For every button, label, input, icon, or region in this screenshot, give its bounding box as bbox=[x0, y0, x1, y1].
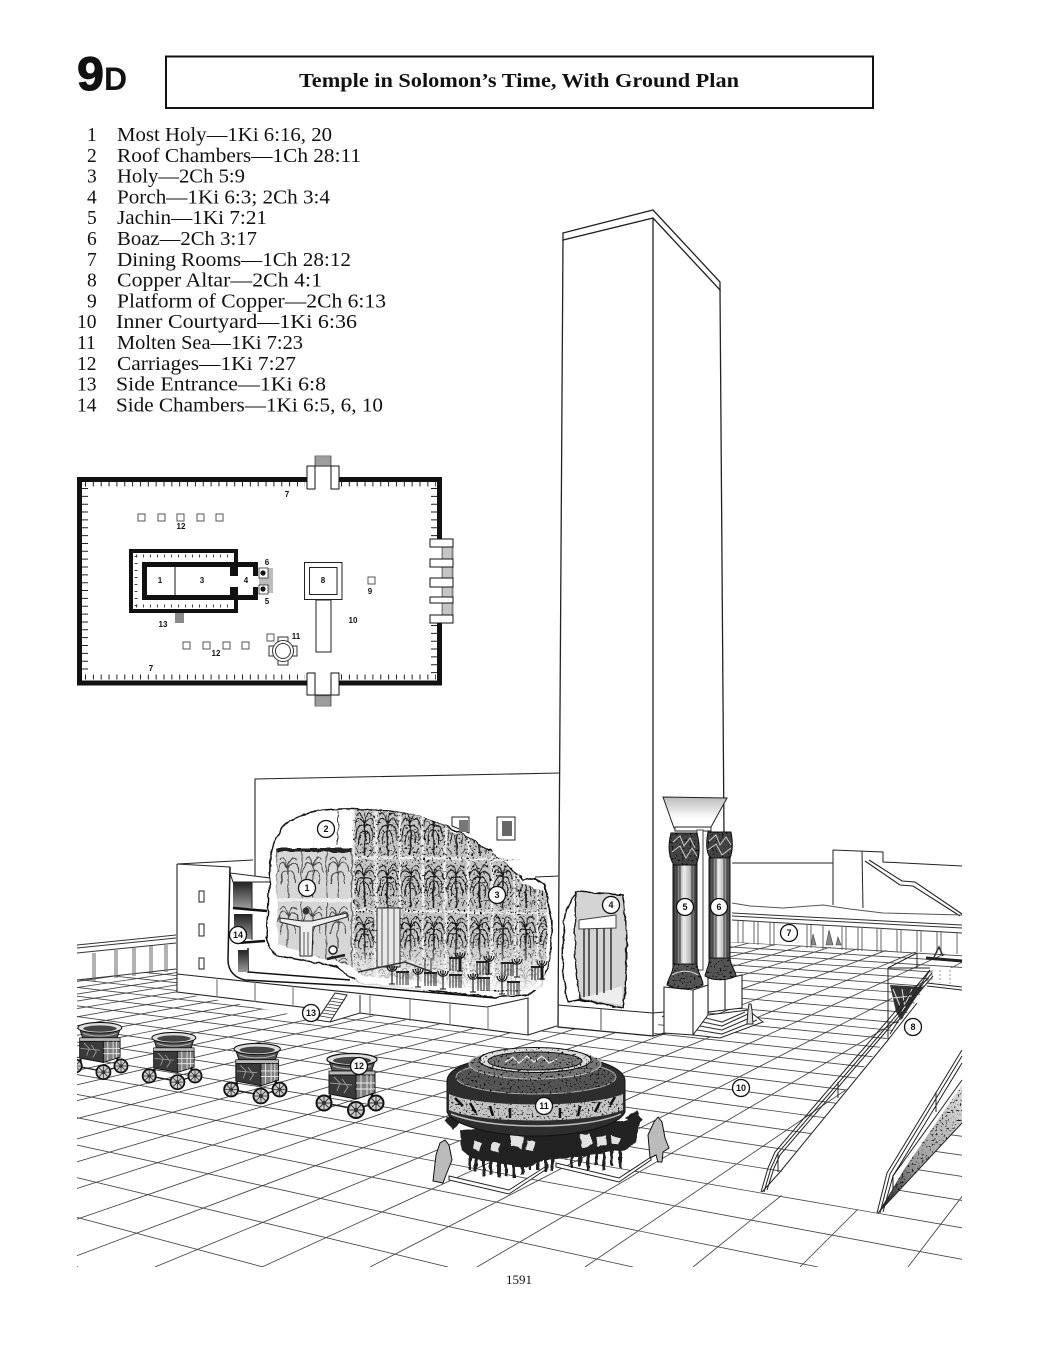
porch front stairs bbox=[693, 1010, 763, 1038]
numbered legend list: Boaz—2Ch 3:17 bbox=[117, 229, 257, 250]
temple building body bbox=[177, 773, 560, 1035]
numbered legend list: 14 bbox=[77, 395, 97, 416]
numbered legend list: Platform of Copper—2Ch 6:13 bbox=[117, 291, 386, 312]
plan number labels: 12 bbox=[177, 522, 186, 531]
numbered legend list: Roof Chambers—1Ch 28:11 bbox=[117, 146, 361, 167]
numbered callouts: 6 bbox=[716, 902, 722, 912]
plan number labels: 11 bbox=[292, 632, 301, 641]
cherub bbox=[280, 908, 347, 956]
carriage 2 bbox=[143, 1032, 202, 1089]
plan number labels: 6 bbox=[265, 558, 270, 567]
priest figure on stairs bbox=[747, 1004, 753, 1024]
carriage 4 bbox=[316, 1054, 384, 1118]
side wall windows bbox=[199, 891, 204, 969]
copper altar and ramp bbox=[304, 562, 342, 652]
holy room wall carvings bbox=[353, 810, 548, 992]
numbered legend list: Side Chambers—1Ki 6:5, 6, 10 bbox=[116, 395, 383, 416]
sea basin rim bbox=[456, 1048, 616, 1094]
carriage 1 bbox=[69, 1022, 128, 1079]
south gate bbox=[307, 673, 339, 706]
plan number labels: 4 bbox=[244, 576, 249, 585]
altar dark underside bbox=[890, 985, 923, 1020]
temple plan walls bbox=[131, 551, 256, 611]
left courtyard railing bbox=[77, 935, 176, 981]
north gate bbox=[307, 456, 339, 489]
ark of the covenant bbox=[327, 946, 345, 959]
east gate bbox=[430, 539, 453, 623]
sea basin frieze bbox=[449, 1094, 623, 1120]
pylon edges bbox=[558, 210, 724, 1036]
numbered callouts bbox=[230, 820, 922, 1114]
porch pillars and steps bbox=[259, 568, 273, 594]
plan number labels: 10 bbox=[349, 616, 358, 625]
ramp surface bbox=[762, 968, 962, 1213]
porch entablature bbox=[663, 797, 727, 970]
sea platforms bbox=[449, 1157, 651, 1194]
plan number labels: 12 bbox=[212, 649, 221, 658]
numbered callouts: 3 bbox=[494, 890, 500, 900]
carriage squares bbox=[138, 514, 375, 649]
most holy room wall carvings bbox=[276, 848, 353, 968]
numbered legend list: Holy—2Ch 5:9 bbox=[117, 167, 245, 188]
oxen bbox=[445, 1110, 643, 1178]
numbered callouts: 14 bbox=[233, 930, 243, 940]
wall mass bbox=[177, 773, 560, 1035]
column 5 Jachin bbox=[667, 833, 703, 989]
title box: Temple in Solomon’s Time, With Ground Plan bbox=[299, 70, 739, 92]
cutaway opening bbox=[266, 809, 552, 997]
numbered legend list: 1 bbox=[87, 125, 97, 146]
title box bbox=[166, 56, 873, 108]
numbered legend list: 9 bbox=[87, 291, 97, 312]
porch cut opening bbox=[563, 892, 627, 1008]
numbered legend list: 7 bbox=[87, 250, 97, 271]
numbered callouts: 7 bbox=[786, 928, 792, 938]
numbered legend list: Porch—1Ki 6:3; 2Ch 3:4 bbox=[117, 187, 330, 208]
section badge 9D: D bbox=[104, 61, 127, 97]
courtyard outer wall bbox=[80, 480, 440, 683]
back courtyard people bbox=[811, 930, 841, 945]
numbered callouts: 8 bbox=[910, 1022, 916, 1032]
sea basin body bbox=[447, 1054, 625, 1136]
numbered legend list: Molten Sea—1Ki 7:23 bbox=[117, 333, 303, 354]
numbered legend list: 10 bbox=[77, 312, 96, 333]
attendant right bbox=[648, 1117, 669, 1162]
numbered legend list: Carriages—1Ki 7:27 bbox=[117, 354, 296, 375]
right ramp rail and shaded underside bbox=[878, 1085, 962, 1213]
numbered legend list: Side Entrance—1Ki 6:8 bbox=[116, 375, 326, 396]
numbered callouts: 12 bbox=[354, 1061, 364, 1071]
numbered legend list: Copper Altar—2Ch 4:1 bbox=[117, 271, 322, 292]
side entrance stairs bbox=[317, 993, 360, 1022]
numbered legend list: Dining Rooms—1Ch 28:12 bbox=[117, 250, 351, 271]
side entrance bbox=[175, 613, 184, 623]
altar platform top bbox=[888, 947, 962, 1034]
courtyard floor grid bbox=[77, 942, 962, 1267]
copper altar ramp bbox=[761, 947, 962, 1213]
plan number labels: 3 bbox=[200, 576, 205, 585]
pedestals bbox=[664, 975, 742, 1035]
carriage 3 bbox=[224, 1043, 286, 1103]
upper wall windows bbox=[452, 817, 515, 840]
plan number labels: 7 bbox=[285, 490, 290, 499]
numbered legend list: 8 bbox=[87, 271, 97, 292]
numbered legend list: 6 bbox=[87, 229, 97, 250]
page number: 1591 bbox=[506, 1272, 532, 1287]
holy room floor fade bbox=[355, 812, 545, 990]
temple doors bbox=[377, 908, 400, 967]
section badge 9D bbox=[77, 47, 127, 100]
numbered legend list: Jachin—1Ki 7:21 bbox=[117, 208, 267, 229]
courtyard wall chamber ticks bbox=[85, 484, 436, 677]
left ramp rail bbox=[761, 970, 933, 1192]
roof chamber divider bbox=[337, 811, 339, 845]
plan number labels: 13 bbox=[159, 620, 168, 629]
numbered legend list: Most Holy—1Ki 6:16, 20 bbox=[117, 125, 332, 146]
numbered callouts: 11 bbox=[539, 1101, 549, 1111]
side chambers cutaway bbox=[228, 867, 495, 998]
numbered callouts: 1 bbox=[304, 883, 310, 893]
numbered legend list: 11 bbox=[77, 333, 96, 354]
numbered callouts: 2 bbox=[323, 824, 329, 834]
numbered callouts: 10 bbox=[736, 1083, 746, 1093]
ground plan bbox=[80, 456, 453, 706]
numbered callouts: 5 bbox=[682, 902, 688, 912]
plan number labels: 9 bbox=[368, 587, 373, 596]
numbered legend list: 5 bbox=[87, 208, 97, 229]
wall outlines bbox=[177, 773, 560, 1035]
porch doorway bbox=[579, 915, 622, 1005]
plan number labels: 7 bbox=[149, 664, 154, 673]
numbered legend list: 2 bbox=[87, 146, 97, 167]
pylon walls bbox=[557, 218, 724, 1036]
plan number labels: 1 bbox=[158, 576, 163, 585]
tower pylon bbox=[557, 210, 763, 1038]
back courtyard walls, gate tower and dining rooms bbox=[732, 850, 962, 954]
molten sea plan bbox=[269, 637, 297, 665]
lampstands and tables bbox=[358, 952, 547, 995]
numbered legend list: 4 bbox=[87, 187, 97, 208]
numbered legend list: Inner Courtyard—1Ki 6:36 bbox=[116, 312, 357, 333]
plan number labels: 8 bbox=[321, 576, 326, 585]
attendant left bbox=[433, 1140, 452, 1183]
column 6 Boaz bbox=[705, 832, 736, 980]
numbered callouts: 13 bbox=[306, 1008, 316, 1018]
numbered callouts: 4 bbox=[608, 900, 614, 910]
section badge 9D: 9 bbox=[77, 47, 104, 100]
molten sea bbox=[433, 1048, 669, 1194]
numbered legend list bbox=[77, 125, 386, 416]
numbered legend list: 12 bbox=[77, 354, 96, 375]
plan number labels bbox=[149, 490, 373, 673]
numbered legend list: 3 bbox=[87, 167, 97, 188]
plan number labels: 5 bbox=[265, 597, 270, 606]
page canvas bbox=[76, 56, 962, 1284]
numbered legend list: 13 bbox=[77, 375, 96, 396]
